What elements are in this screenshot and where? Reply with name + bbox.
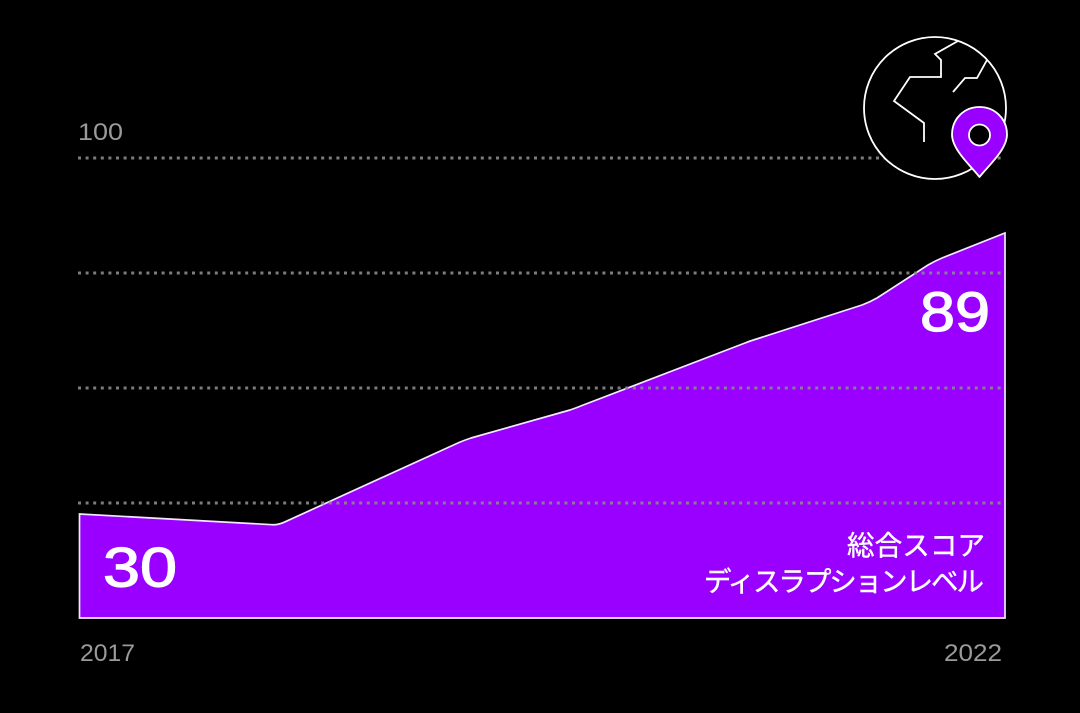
area chart: disruption score 2017 to 2022 — [80, 233, 1005, 618]
icon: globe with location pin — [864, 37, 1007, 179]
chart label: 総合スコア — [847, 530, 985, 561]
value: 30: 30 — [103, 536, 177, 598]
chart label: ディスラプションレベル — [704, 566, 984, 597]
axis label: 100: 100 — [78, 119, 123, 146]
axis label: 2017: 2017 — [80, 640, 135, 667]
chart label — [704, 530, 985, 597]
value: 89: 89 — [920, 280, 990, 343]
axis label: 2022: 2022 — [944, 640, 1002, 667]
